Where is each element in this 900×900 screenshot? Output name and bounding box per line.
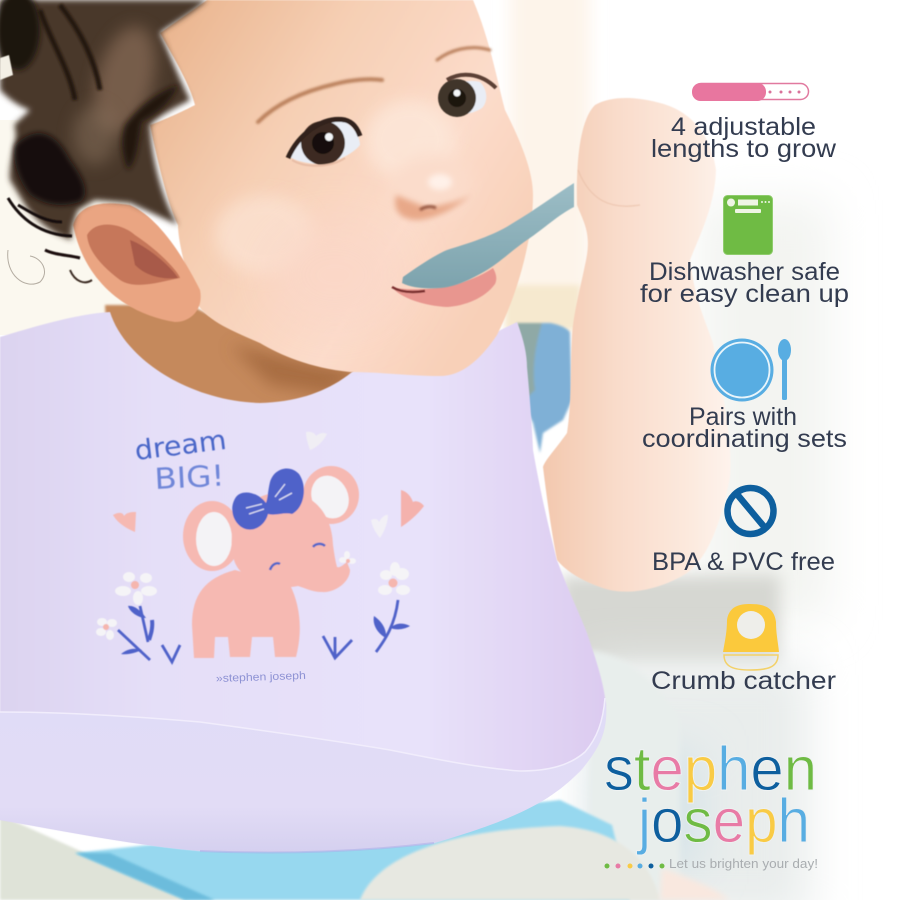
feature text: lengths to grow: lengths to grow bbox=[651, 135, 837, 163]
elephant body bbox=[192, 570, 300, 658]
elephant bow bbox=[232, 468, 304, 530]
photo: baby right eye bbox=[438, 75, 496, 117]
stems and grass bbox=[118, 600, 398, 662]
photo: neck bbox=[105, 305, 360, 415]
bib artwork: brand mark: »stephen joseph bbox=[216, 670, 306, 685]
photo: baby brows bbox=[258, 48, 490, 122]
feature text: BPA and PVC free: BPA & PVC free bbox=[652, 548, 835, 576]
logo: stephen joseph: joseph bbox=[636, 787, 810, 856]
text: dream BIG: dream bbox=[133, 425, 228, 467]
photo: seat and legs bbox=[0, 650, 730, 900]
icon: prohibited sign bbox=[728, 488, 774, 534]
photo: curly hair bbox=[0, 0, 207, 284]
elephant head and trunk bbox=[232, 492, 350, 592]
photo: bib crumb pocket bbox=[0, 698, 606, 852]
photo: spoon bbox=[402, 183, 574, 288]
logo: stephen joseph bbox=[604, 735, 818, 871]
photo: bib body bbox=[0, 312, 606, 852]
photo: baby left eye bbox=[288, 119, 360, 166]
hearts bbox=[113, 512, 136, 532]
photo: ear bbox=[73, 203, 201, 322]
feature text: coordinating sets: coordinating sets bbox=[642, 425, 847, 453]
text: dream BIG: BIG! bbox=[154, 458, 225, 496]
feature text: easy clean up: for easy clean up bbox=[640, 280, 849, 308]
photo: ruffled sleeve bbox=[517, 323, 572, 453]
logo: stephen joseph: stephen bbox=[604, 735, 817, 804]
feature text: adjustable lengths: 4 adjustable bbox=[671, 113, 816, 141]
icon: yellow bib bbox=[723, 604, 779, 670]
logo: stephen joseph: Let us brighten your day! bbox=[669, 857, 818, 871]
feature text: pairs with: Pairs with bbox=[689, 403, 797, 431]
icon: dishwasher bbox=[724, 196, 772, 254]
feature text: crumb catcher: Crumb catcher bbox=[651, 667, 836, 695]
photo: baby nose bbox=[392, 155, 473, 220]
feature text: dishwasher safe: Dishwasher safe bbox=[649, 258, 840, 286]
elephant eyes bbox=[270, 544, 325, 570]
elephant ears bbox=[183, 466, 359, 571]
photo: baby mouth bbox=[392, 268, 496, 307]
bib artwork: dream BIG and elephant bbox=[96, 425, 424, 662]
flowers bbox=[96, 551, 410, 640]
icon: adjustable strap bbox=[692, 83, 808, 101]
photo: baby face bbox=[150, 0, 533, 376]
photo: baby arm and hand bbox=[543, 98, 731, 592]
text: dream BIG bbox=[133, 425, 228, 496]
icon: plate and spoon bbox=[710, 338, 791, 402]
